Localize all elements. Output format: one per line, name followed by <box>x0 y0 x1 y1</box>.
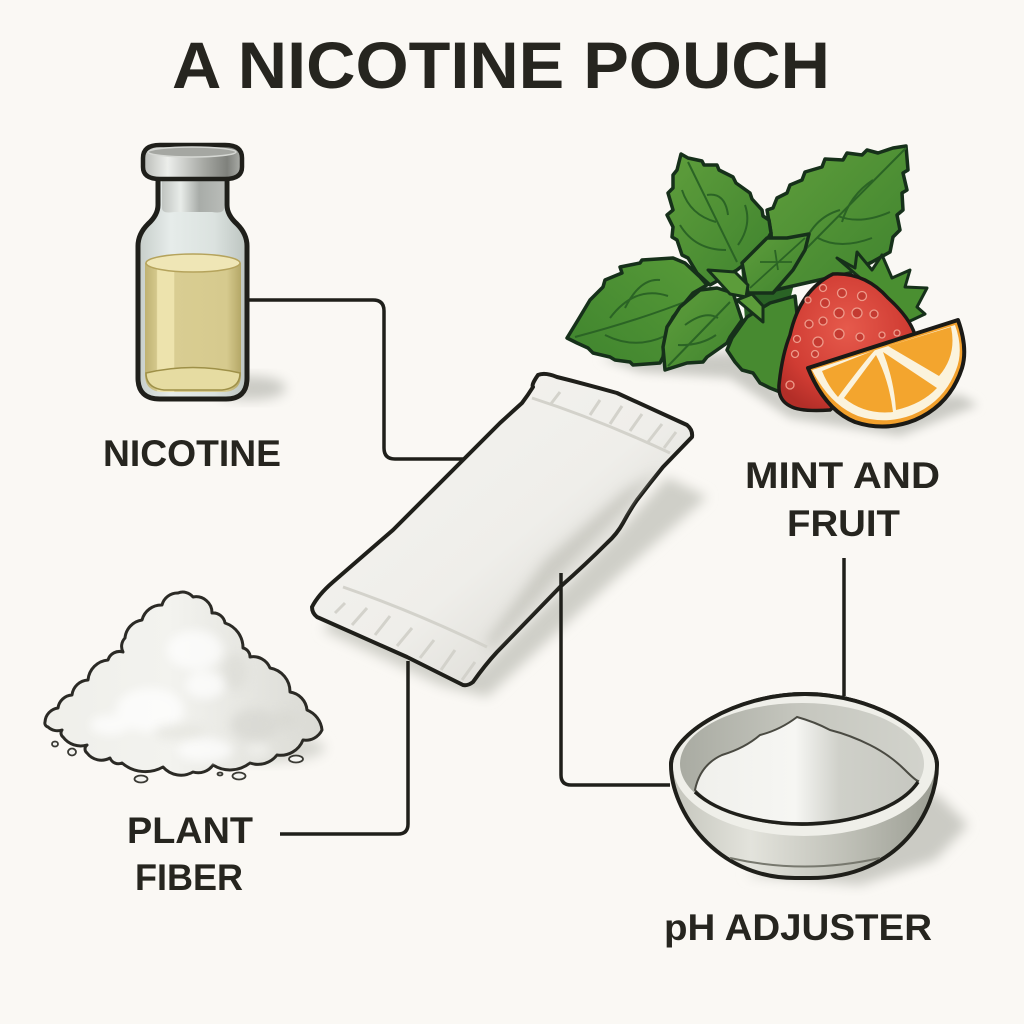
bowl interior <box>680 703 924 825</box>
orange slice <box>808 320 964 427</box>
veins: lower leaf <box>668 302 730 366</box>
pile lumps <box>94 632 274 766</box>
inner rim line <box>695 782 918 824</box>
label: mint and fruit <box>745 455 940 544</box>
pile crumbs <box>52 742 303 782</box>
strawberry calyx <box>837 252 927 322</box>
title: A NICOTINE POUCH <box>172 28 830 102</box>
label: nicotine: NICOTINE <box>103 433 281 474</box>
connector: pH adjuster to pouch <box>561 573 670 785</box>
liquid surface <box>146 254 240 272</box>
cap opening <box>148 147 236 157</box>
leaf: tiny left <box>708 270 748 297</box>
vial neck shading <box>162 180 224 212</box>
icon: pouch <box>312 374 707 697</box>
veins: small center leaf <box>750 238 805 288</box>
icon: nicotine vial <box>138 145 286 400</box>
pouch bottom seal <box>343 587 487 647</box>
vial cap <box>143 145 242 179</box>
label: pH adjuster: pH ADJUSTER <box>664 907 932 948</box>
vial liquid <box>145 256 241 392</box>
bowl foot line <box>730 858 880 866</box>
leaf: tiny lower <box>737 294 763 322</box>
leaf: bottom <box>727 296 800 392</box>
leaf: top left <box>667 154 771 285</box>
orange pith <box>812 325 960 420</box>
strawberry <box>779 274 915 410</box>
leaf: lower <box>663 288 742 370</box>
leaf: left <box>567 258 707 365</box>
icon: mint and fruit <box>567 146 978 436</box>
ground shadow <box>600 352 978 436</box>
bowl top edge <box>671 694 937 765</box>
veins: top left leaf <box>680 162 747 262</box>
label: plant fiber <box>127 810 253 898</box>
bowl rim <box>673 696 935 836</box>
icon: pH adjuster bowl <box>671 694 968 885</box>
powder in bowl <box>695 717 918 825</box>
veins: top right leaf <box>800 148 906 255</box>
connector: mint and fruit to bowl <box>842 558 846 696</box>
liquid bottom <box>146 368 240 390</box>
connector: plant fiber to pouch <box>280 661 408 834</box>
label: mint and fruit: MINT AND <box>745 455 940 496</box>
vial glass body <box>138 178 247 399</box>
leaf: small center <box>742 234 809 293</box>
veins: left leaf <box>575 280 695 343</box>
pouch body <box>312 374 692 685</box>
pouch side shading <box>487 470 660 650</box>
label: mint and fruit: FRUIT <box>787 503 900 544</box>
icon: plant fiber pile <box>45 592 325 782</box>
seal ribs <box>335 392 676 680</box>
dark backing between leaves <box>740 215 800 320</box>
pouch top seal <box>532 398 670 453</box>
label: plant fiber: PLANT <box>127 810 253 851</box>
bowl outer <box>671 694 937 878</box>
pouch shadow <box>323 477 707 697</box>
leaf: top right <box>767 146 908 290</box>
connector: nicotine to pouch <box>248 300 466 459</box>
label: plant fiber: FIBER <box>135 857 243 898</box>
strawberry seeds <box>786 284 900 389</box>
orange segments <box>822 350 875 397</box>
